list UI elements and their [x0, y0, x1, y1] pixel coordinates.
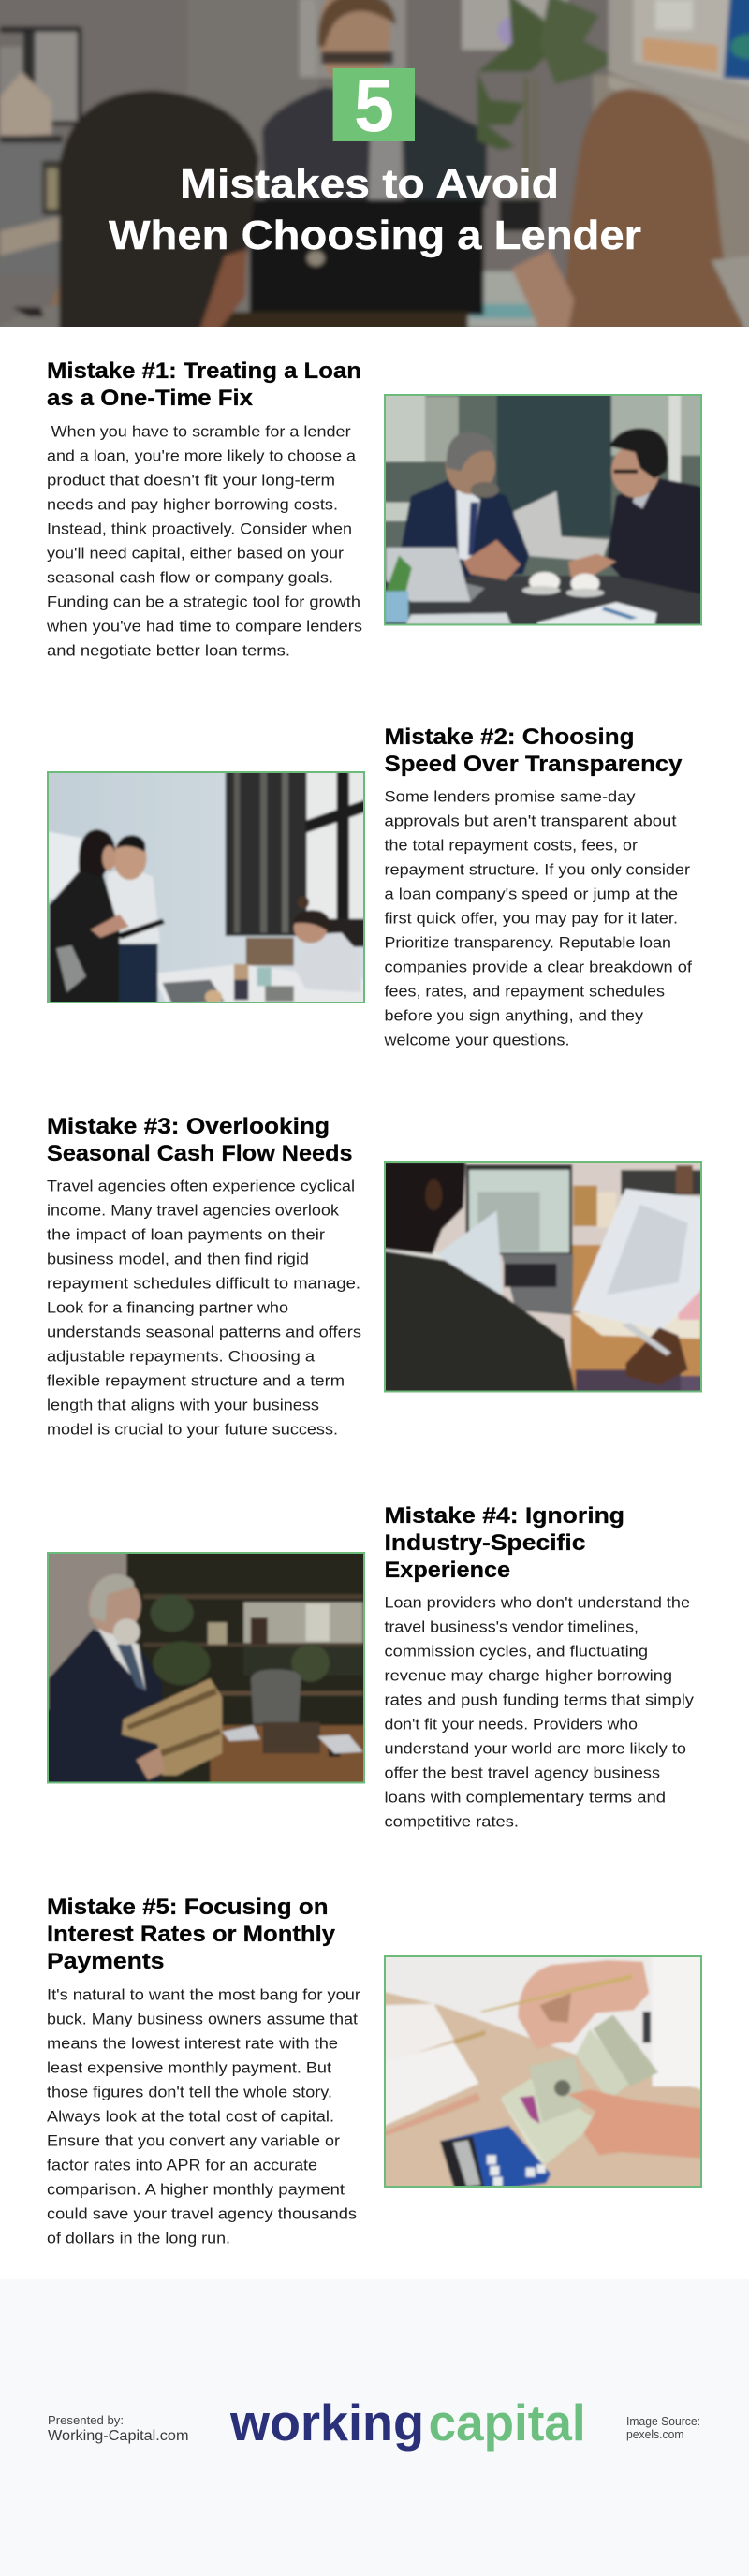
- title: When Choosing a Lender: [109, 212, 641, 258]
- body text: flexible repayment structure and a term: [47, 1372, 345, 1390]
- body text: loans with complementary terms and: [384, 1789, 666, 1807]
- logo: working: [229, 2393, 424, 2452]
- panel: mistake 3: [47, 1114, 712, 1439]
- man from behind: [59, 91, 259, 330]
- body text: approvals but aren't transparent about: [384, 812, 677, 830]
- body text: fees, rates, and repayment schedules: [384, 983, 665, 1001]
- heading: [47, 1895, 336, 1974]
- right wall, corkboard, poster: [592, 73, 749, 259]
- body text: Loan providers who don't understand the: [384, 1594, 690, 1612]
- body text: before you sign anything, and they: [384, 1007, 644, 1025]
- heading: Seasonal Cash Flow Needs: [47, 1141, 353, 1166]
- body text: a loan company's speed or jump at the: [384, 886, 678, 903]
- body text: understand your world are more likely to: [384, 1740, 686, 1758]
- logo: capital: [429, 2393, 586, 2452]
- body text: [383, 788, 692, 1049]
- body text: competitive rates.: [384, 1813, 519, 1831]
- body text: seasonal cash flow or company goals.: [47, 569, 333, 587]
- body text: comparison. A higher monthly payment: [47, 2181, 345, 2199]
- body text: and a loan, you're more likely to choose a: [47, 447, 357, 465]
- body text: Funding can be a strategic tool for growth: [47, 593, 360, 611]
- heading: Mistake #1: Treating a Loan: [47, 359, 361, 384]
- laptop: [464, 269, 539, 327]
- woman with long hair: [565, 89, 749, 330]
- body text: and negotiate better loan terms.: [47, 642, 290, 660]
- presented by credit: Presented by:: [48, 2413, 124, 2427]
- body text: the impact of loan payments on their: [47, 1226, 325, 1244]
- panel: mistake 5: [47, 1895, 712, 2247]
- body text: needs and pay higher borrowing costs.: [47, 496, 338, 514]
- number badge: [333, 64, 415, 147]
- body text: when you've had time to compare lenders: [46, 618, 362, 636]
- hero photo: meeting in an office: [0, 0, 749, 340]
- body text: When you have to scramble for a lender: [51, 423, 351, 441]
- heading: [384, 1503, 624, 1583]
- footer: [0, 2279, 749, 2576]
- image source credit: pexels.com: [626, 2427, 683, 2441]
- man at centre: [366, 141, 403, 202]
- heading: Industry-Specific: [384, 1530, 586, 1556]
- photo: hands counting cash over a calculator: [384, 1955, 702, 2188]
- body text: repayment schedules difficult to manage.: [47, 1275, 360, 1293]
- panel: mistake 4: [38, 1503, 695, 1831]
- body text: [47, 1178, 361, 1439]
- heading: [47, 359, 361, 411]
- body text: adjustable repayments. Choosing a: [47, 1348, 316, 1366]
- photo: two businessmen talking at a table: [384, 394, 702, 625]
- body text: those figures don't tell the whole story.: [47, 2084, 332, 2101]
- body text: offer the best travel agency business: [384, 1764, 660, 1782]
- heading: Speed Over Transparency: [384, 752, 683, 777]
- body text: the total repayment costs, fees, or: [384, 837, 638, 855]
- body text: buck. Many business owners assume that: [47, 2011, 358, 2028]
- body text: first quick offer, you may pay for it later.: [384, 910, 678, 928]
- body text: Always look at the total cost of capital.: [47, 2108, 334, 2126]
- heading: Interest Rates or Monthly: [47, 1922, 336, 1947]
- body text: income. Many travel agencies overlook: [47, 1202, 340, 1220]
- logo: [229, 2393, 586, 2452]
- heading: [47, 1114, 353, 1166]
- body text: product that doesn't fit your long-term: [47, 472, 335, 490]
- body text: understands seasonal patterns and offers: [47, 1324, 361, 1341]
- body text: commission cycles, and fluctuating: [384, 1643, 648, 1661]
- body text: rates and push funding terms that simply: [384, 1691, 695, 1709]
- body text: of dollars in the long run.: [47, 2230, 230, 2247]
- presented by credit: Working-Capital.com: [48, 2428, 189, 2444]
- photo: person reviewing documents at a laptop: [384, 1161, 702, 1393]
- body text: Ensure that you convert any variable or: [47, 2132, 340, 2150]
- heading: Mistake #3: Overlooking: [47, 1114, 330, 1139]
- body text: length that aligns with your business: [47, 1397, 319, 1414]
- body text: [47, 1986, 360, 2247]
- heading: Payments: [47, 1949, 165, 1974]
- panel: mistake 2: [38, 724, 692, 1049]
- body text: model is crucial to your future success.: [47, 1421, 338, 1439]
- panel: mistake 1: [46, 359, 712, 660]
- body text: welcome your questions.: [383, 1032, 569, 1049]
- body text: companies provide a clear breakdown of: [384, 959, 692, 976]
- image source credit: Image Source:: [626, 2414, 700, 2428]
- body text: Some lenders promise same-day: [384, 788, 636, 806]
- heading: Mistake #4: Ignoring: [384, 1503, 624, 1529]
- body text: revenue may charge higher borrowing: [384, 1667, 672, 1685]
- heading: [384, 724, 683, 777]
- body text: business model, and then find rigid: [47, 1251, 309, 1268]
- title: Mistakes to Avoid: [180, 161, 559, 207]
- heading: Mistake #5: Focusing on: [47, 1895, 328, 1920]
- body text: means the lowest interest rate with the: [47, 2035, 338, 2053]
- title: [109, 161, 641, 258]
- presented by credit: [48, 2413, 189, 2444]
- heading: Mistake #2: Choosing: [384, 724, 635, 750]
- photo: businessman carrying a stack of folders: [47, 1552, 365, 1784]
- number badge: 5: [354, 64, 394, 147]
- body text: [384, 1594, 695, 1831]
- image source credit: [626, 2414, 700, 2441]
- body text: Travel agencies often experience cyclical: [47, 1178, 355, 1195]
- body text: Instead, think proactively. Consider when: [47, 520, 352, 538]
- hero header: [0, 0, 749, 340]
- body text: least expensive monthly payment. But: [47, 2059, 331, 2077]
- body text: you'll need capital, either based on your: [47, 545, 344, 563]
- body text: It's natural to want the most bang for your: [47, 1986, 360, 2004]
- body text: factor rates into APR for an accurate: [47, 2157, 317, 2174]
- body text: repayment structure. If you only consider: [384, 861, 690, 879]
- body text: Prioritize transparency. Reputable loan: [384, 934, 671, 952]
- body text: [46, 423, 362, 660]
- shelf and house: [0, 138, 63, 274]
- body text: Look for a financing partner who: [47, 1299, 288, 1317]
- heading: as a One-Time Fix: [47, 386, 254, 411]
- heading: Experience: [384, 1558, 510, 1583]
- body text: could save your travel agency thousands: [47, 2205, 357, 2223]
- body text: travel business's vendor timelines,: [384, 1618, 639, 1636]
- plant: [462, 0, 568, 50]
- photo: colleagues reviewing a tablet in a bright office: [47, 771, 365, 1003]
- body text: don't fit your needs. Providers who: [384, 1716, 638, 1734]
